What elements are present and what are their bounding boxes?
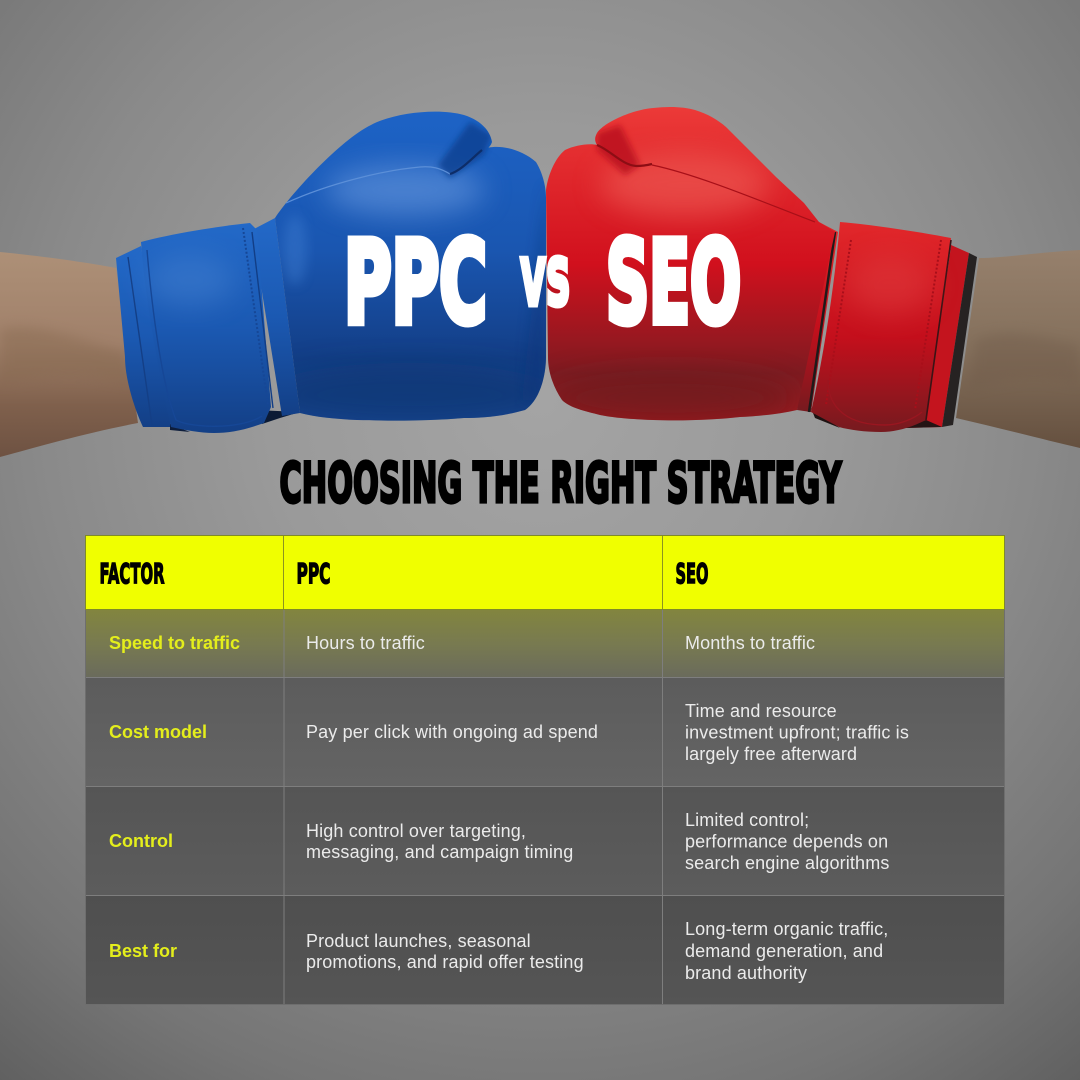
ppc: cost: Pay per click with ongoing ad spend [306, 722, 598, 742]
left arm [0, 252, 138, 457]
ppc: best for: promotions, and rapid offer testing [306, 952, 584, 972]
blue boxing glove [116, 112, 560, 433]
ppc: speed: Hours to traffic [306, 633, 425, 653]
ppc: control: High control over targeting, [306, 821, 526, 841]
header: seo: SEO [676, 557, 708, 590]
ppc: control: messaging, and campaign timing [306, 842, 573, 862]
right arm [956, 250, 1080, 448]
seo: control: performance depends on [685, 832, 888, 852]
seo: speed: Months to traffic [685, 633, 815, 653]
table header row [86, 536, 1004, 610]
row: cost model [86, 678, 1004, 786]
hero title: PPC: PPC [344, 217, 487, 349]
seo: cost: Time and resource [685, 701, 837, 721]
seo: control: Limited control; [685, 810, 809, 830]
header: ppc: PPC [296, 557, 330, 590]
row: control [86, 787, 1004, 896]
label: cost model: Cost model [109, 722, 207, 742]
red boxing glove [540, 107, 977, 432]
seo: best for: Long-term organic traffic, [685, 919, 888, 939]
text: vs [520, 226, 570, 326]
comparison table [86, 536, 1004, 1005]
seo: cost: investment upfront; traffic is [685, 722, 909, 742]
header: factor: FACTOR [100, 557, 164, 590]
seo: control: search engine algorithms [685, 853, 889, 873]
seo: best for: demand generation, and [685, 941, 883, 961]
row: speed to traffic [86, 610, 1004, 678]
hero title: SEO: SEO [606, 217, 741, 349]
ppc: best for: Product launches, seasonal [306, 931, 531, 951]
label: control: Control [109, 831, 173, 851]
seo: best for: brand authority [685, 963, 807, 983]
seo: cost: largely free afterward [685, 744, 857, 764]
label: best for: Best for [109, 941, 177, 961]
row: best for [86, 896, 1004, 1004]
label: speed to traffic: Speed to traffic [109, 633, 240, 653]
